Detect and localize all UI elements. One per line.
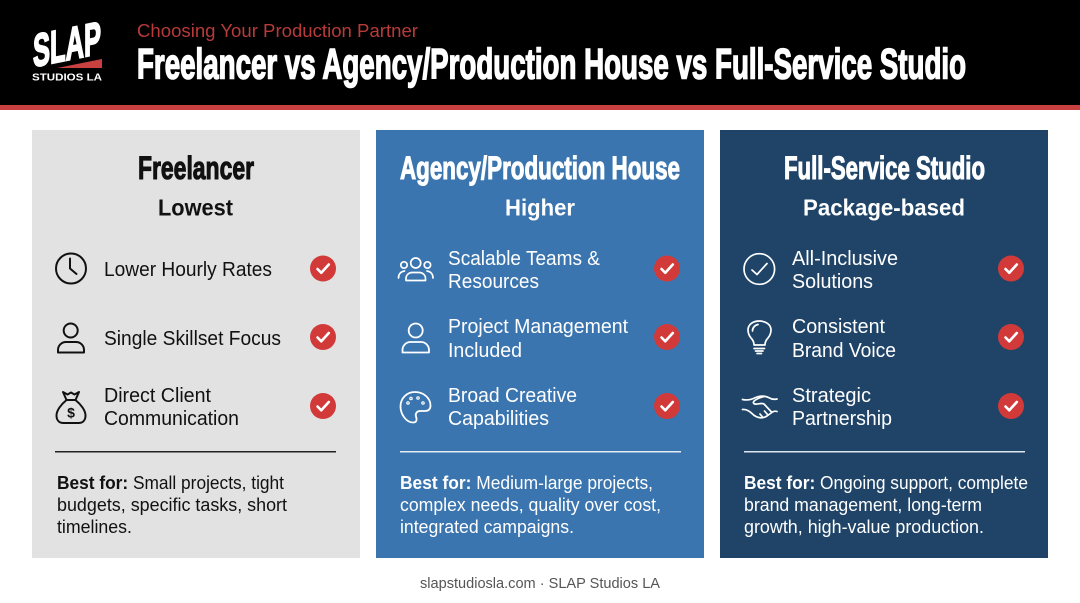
logo: SLAP Studios LA: [32, 12, 102, 83]
icon: team: [398, 258, 433, 280]
heading: Full-Service Studio: Full-Service Studio: [784, 150, 985, 186]
icon: money bag: $: [67, 404, 75, 420]
icon: clock: [56, 254, 86, 284]
panel: Agency/Production House: [376, 130, 704, 558]
feature: Broad Creative Capabilities: Capabilities: [448, 408, 549, 430]
icon: money bag: [56, 392, 86, 423]
check: [998, 393, 1024, 419]
best for text: complex needs, quality over cost,: [400, 495, 661, 515]
best for text: Best for: Small projects, tight: [57, 473, 284, 493]
feature: Project Management Included: Included: [448, 340, 522, 362]
check: [654, 393, 680, 419]
header band: [0, 0, 1080, 110]
feature: Consistent Brand Voice: [792, 316, 896, 362]
best for text: brand management, long-term: [744, 495, 982, 515]
feature: Lower Hourly Rates: Lower Hourly Rates: [104, 259, 272, 281]
feature: Project Management Included: [448, 316, 628, 362]
feature: Strategic Partnership: Strategic: [792, 385, 871, 407]
best for text: Best for: Medium-large projects,: [400, 473, 653, 493]
price tier: Package-based: Package-based: [803, 194, 965, 220]
panel: Full-Service Studio: [720, 130, 1048, 558]
feature: Scalable Teams & Resources: Scalable Teams &: [448, 248, 601, 270]
price tier: Higher: Higher: [505, 194, 575, 220]
icon: light bulb: [748, 321, 771, 354]
feature: Direct Client Communication: Communication: [104, 408, 239, 430]
feature: Scalable Teams & Resources: Resources: [448, 271, 539, 293]
feature: All-Inclusive Solutions: All-Inclusive: [792, 248, 898, 270]
icon: palette: [400, 392, 430, 422]
best for text: integrated campaigns.: [400, 517, 574, 537]
feature: Consistent Brand Voice: Consistent: [792, 316, 885, 338]
feature: Single Skillset Focus: Single Skillset Focus: [104, 328, 281, 350]
best for text: timelines.: [57, 517, 132, 537]
check: [654, 324, 680, 350]
feature: Scalable Teams & Resources: [448, 248, 601, 293]
feature: Strategic Partnership: Partnership: [792, 408, 892, 430]
feature: Broad Creative Capabilities: Broad Creative: [448, 385, 577, 407]
icon: check circle: [744, 254, 775, 284]
feature: Broad Creative Capabilities: [448, 385, 577, 430]
feature: Direct Client Communication: Direct Client: [104, 385, 211, 407]
check: [654, 256, 680, 282]
heading: Agency/Production House: Agency/Production House: [400, 150, 680, 186]
feature: All-Inclusive Solutions: [792, 248, 898, 293]
check: [998, 256, 1024, 282]
check: [310, 324, 336, 350]
feature: All-Inclusive Solutions: Solutions: [792, 271, 873, 293]
feature: Consistent Brand Voice: Brand Voice: [792, 340, 896, 362]
header subtitle: Choosing Your Production Partner: [137, 21, 418, 41]
best for text: budgets, specific tasks, short: [57, 495, 287, 515]
best for text: [400, 473, 661, 537]
check: [998, 324, 1024, 350]
check: [310, 393, 336, 419]
icon: person: [58, 324, 84, 352]
heading: Freelancer: Freelancer: [138, 150, 254, 186]
icon: person: [402, 324, 429, 352]
panel: Freelancer: [32, 130, 360, 558]
feature: Strategic Partnership: [792, 385, 892, 430]
check: [310, 256, 336, 282]
feature: Project Management Included: Project Management: [448, 316, 628, 338]
footer: slapstudiosla.com · SLAP Studios LA: [420, 575, 660, 592]
best for text: growth, high-value production.: [744, 517, 984, 537]
icon: handshake: [742, 396, 777, 418]
best for text: Best for: Ongoing support, complete: [744, 473, 1028, 493]
logo: SLAP Studios LA: SLAP: [33, 12, 101, 77]
logo: SLAP Studios LA: STUDIOS LA: [32, 72, 102, 84]
feature: Direct Client Communication: [104, 385, 239, 430]
price tier: Lowest: Lowest: [158, 194, 233, 220]
best for text: [744, 473, 1028, 537]
best for text: [57, 473, 287, 537]
